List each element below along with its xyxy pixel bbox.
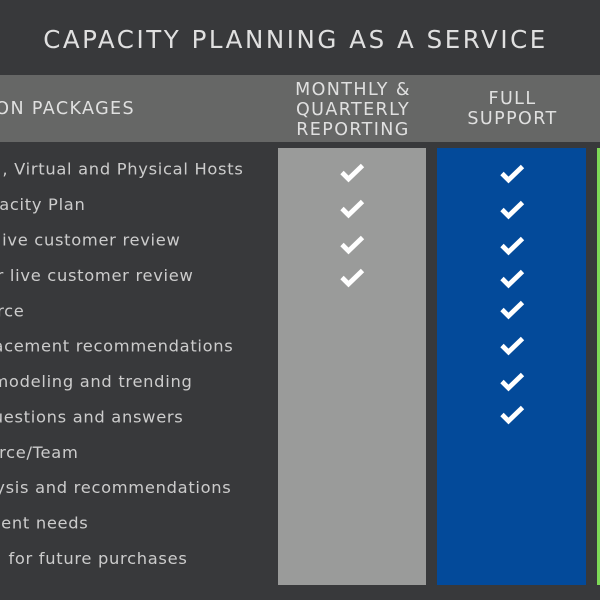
- heading: monthly and quarterly reporting: QUARTERLY: [296, 100, 410, 120]
- heading: full support: [467, 89, 558, 129]
- feature list: acement recommendations: [0, 336, 234, 356]
- checkmarks: monthly and quarterly reporting: [342, 166, 362, 284]
- heading: full support: SUPPORT: [467, 109, 558, 129]
- feature list: ive customer review: [2, 230, 180, 250]
- feature list: acity Plan: [0, 195, 86, 214]
- heading: monthly and quarterly reporting: MONTHLY &: [295, 80, 411, 100]
- heading: monthly and quarterly reporting: REPORTING: [296, 120, 410, 140]
- checkmarks: full support: [502, 166, 522, 421]
- column: green package: [597, 148, 600, 585]
- column: monthly and quarterly reporting: [278, 148, 426, 585]
- header band: [0, 75, 600, 142]
- feature list: r live customer review: [0, 266, 194, 285]
- feature list: , Virtual and Physical Hosts: [2, 160, 244, 178]
- feature list: rce/Team: [0, 443, 78, 462]
- feature list: [0, 160, 244, 568]
- feature list: for future purchases: [8, 549, 188, 568]
- heading: full support: FULL: [489, 89, 536, 109]
- title: CAPACITY PLANNING AS A SERVICE: [43, 25, 548, 54]
- feature list: ysis and recommendations: [0, 478, 232, 497]
- feature list: ent needs: [1, 514, 88, 532]
- column: full support: [437, 148, 586, 585]
- heading: monthly and quarterly reporting: [295, 80, 411, 140]
